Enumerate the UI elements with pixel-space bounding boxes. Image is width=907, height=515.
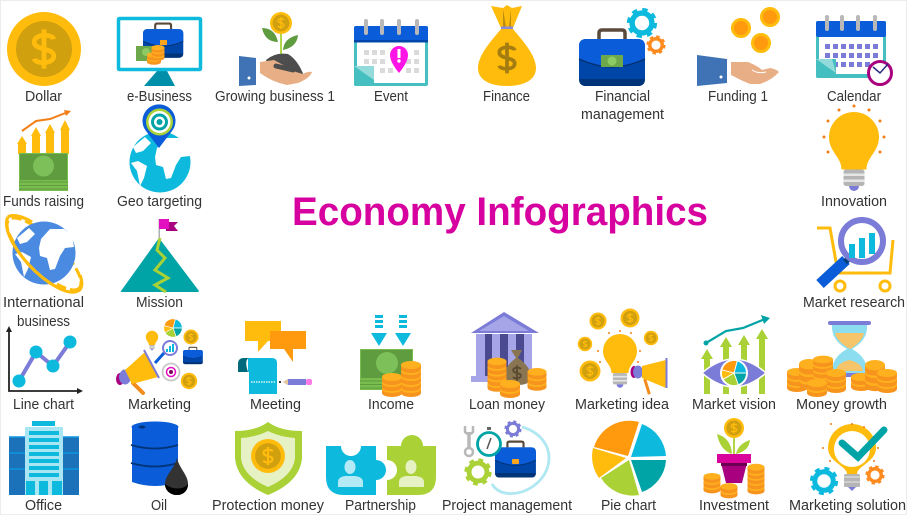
label: Market vision — [692, 397, 776, 413]
icon: hourglass with coin stacks — [787, 321, 897, 397]
item: Pie chart — [592, 421, 666, 514]
item: Investment — [699, 418, 769, 514]
item: Geo targeting — [117, 104, 202, 210]
label: Project management — [442, 498, 572, 514]
label: Money growth — [796, 397, 887, 413]
label: Loan money — [469, 397, 546, 413]
label: business — [17, 314, 70, 330]
icon: banknote, coins and arrows — [360, 315, 421, 397]
icon: cart with magnifier — [817, 220, 893, 291]
icon: potted coin plant — [704, 418, 764, 498]
label: Market research — [803, 295, 905, 311]
label: Innovation — [821, 194, 887, 210]
label: Meeting — [250, 397, 301, 413]
icon: banknote with growth arrows — [17, 110, 71, 191]
item: Office — [9, 421, 79, 514]
item: Marketing — [116, 319, 203, 413]
icon: globe with orbit ring — [0, 208, 90, 300]
icon: line chart — [6, 326, 83, 394]
icon: dollar coin — [7, 12, 81, 86]
label: International — [3, 295, 84, 311]
item: Protection money — [212, 422, 325, 514]
icon: bank with money bag and coins — [471, 312, 546, 398]
icon: shield with coin — [235, 422, 302, 495]
item: Marketing solution — [789, 423, 906, 514]
label: Funding 1 — [708, 89, 768, 105]
icon: briefcase, stopwatch, gears and wrench — [465, 421, 549, 494]
icon: mountain with flag — [121, 219, 199, 292]
item: Loan money — [469, 312, 546, 413]
icon: oil barrel and drop — [131, 422, 188, 495]
icon: briefcase and gears — [579, 10, 665, 86]
label: Geo targeting — [117, 194, 202, 210]
label: Marketing — [128, 397, 191, 413]
item: Meeting — [238, 321, 312, 413]
label: Mission — [136, 295, 183, 311]
label: Funds raising — [3, 194, 84, 210]
item: Income — [360, 315, 421, 413]
item: Finance — [478, 5, 536, 105]
item: Dollar — [7, 12, 81, 105]
item: Marketing idea — [575, 308, 670, 413]
label: management — [581, 107, 664, 123]
icon: speech bubbles, scroll and pencil — [238, 321, 312, 394]
item: Project management — [442, 421, 572, 514]
icon: money bag — [478, 5, 536, 86]
label: Pie chart — [601, 498, 656, 514]
icon: light bulb — [822, 104, 886, 191]
label: Oil — [151, 498, 167, 514]
icon: event calendar — [354, 21, 428, 86]
label: Office — [25, 498, 62, 514]
item: Market research — [803, 220, 905, 311]
item: Mission — [121, 219, 199, 311]
label: Growing business 1 — [215, 89, 335, 105]
item: Event — [354, 21, 428, 105]
icon: hand receiving coins — [697, 8, 779, 86]
icon: monitor with briefcase — [118, 18, 200, 86]
item: e-Business — [118, 18, 200, 105]
icon: puzzle pieces with people — [326, 435, 436, 495]
label: Dollar — [25, 89, 62, 105]
label: Partnership — [345, 498, 416, 514]
label: Line chart — [13, 397, 74, 413]
label — [3, 295, 84, 330]
item: Funds raising — [3, 110, 84, 210]
label: e-Business — [127, 89, 192, 105]
label: Calendar — [827, 89, 881, 105]
icon: plant in hand — [239, 12, 312, 86]
item: Oil — [131, 422, 188, 514]
item: Partnership — [326, 435, 436, 514]
item: International business — [0, 208, 90, 330]
item: Innovation — [821, 104, 887, 210]
label: Protection money — [212, 498, 325, 514]
label: Finance — [483, 89, 530, 105]
item: Money growth — [787, 321, 897, 413]
icon: globe with location pin — [130, 104, 190, 192]
label: Financial — [595, 89, 650, 105]
label: Marketing idea — [575, 397, 670, 413]
label: Event — [374, 89, 408, 105]
item: Funding 1 — [697, 8, 779, 105]
icon: office buildings — [9, 421, 79, 495]
icon: bulb with check mark and gears — [811, 423, 884, 494]
icon: megaphone with marketing symbols — [116, 319, 203, 393]
icon: eye with growth arrows — [701, 315, 770, 394]
item: Line chart — [6, 326, 83, 413]
item: Financial management — [579, 10, 665, 123]
icon: bulb, coins and megaphone — [578, 308, 668, 393]
item: Market vision — [692, 315, 776, 413]
label: Marketing solution — [789, 498, 906, 514]
icon: pie chart — [592, 421, 666, 496]
title: Economy Infographics — [292, 190, 708, 234]
item: Calendar — [816, 17, 892, 105]
label — [581, 89, 664, 123]
label: Income — [368, 397, 414, 413]
item: Growing business 1 — [215, 12, 335, 105]
icon: calendar with clock — [816, 17, 892, 84]
label: Investment — [699, 498, 769, 514]
